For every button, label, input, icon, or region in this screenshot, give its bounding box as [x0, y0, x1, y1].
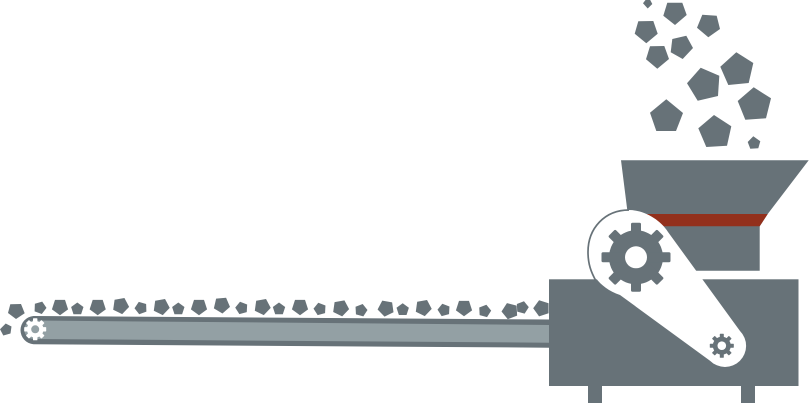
- hopper funnel: [621, 160, 809, 271]
- icon: small gear: [710, 334, 734, 358]
- red hopper band: [640, 214, 768, 226]
- conveyor belt: [20, 316, 550, 348]
- icon: conveyor end gear: [24, 318, 46, 340]
- small rocks travelling on the belt: [0, 297, 549, 336]
- machine base: [549, 279, 798, 386]
- machine legs: [588, 386, 755, 403]
- drive belt cover: [588, 210, 746, 367]
- falling large rocks: [635, 0, 771, 149]
- icon: large gear: [602, 223, 670, 292]
